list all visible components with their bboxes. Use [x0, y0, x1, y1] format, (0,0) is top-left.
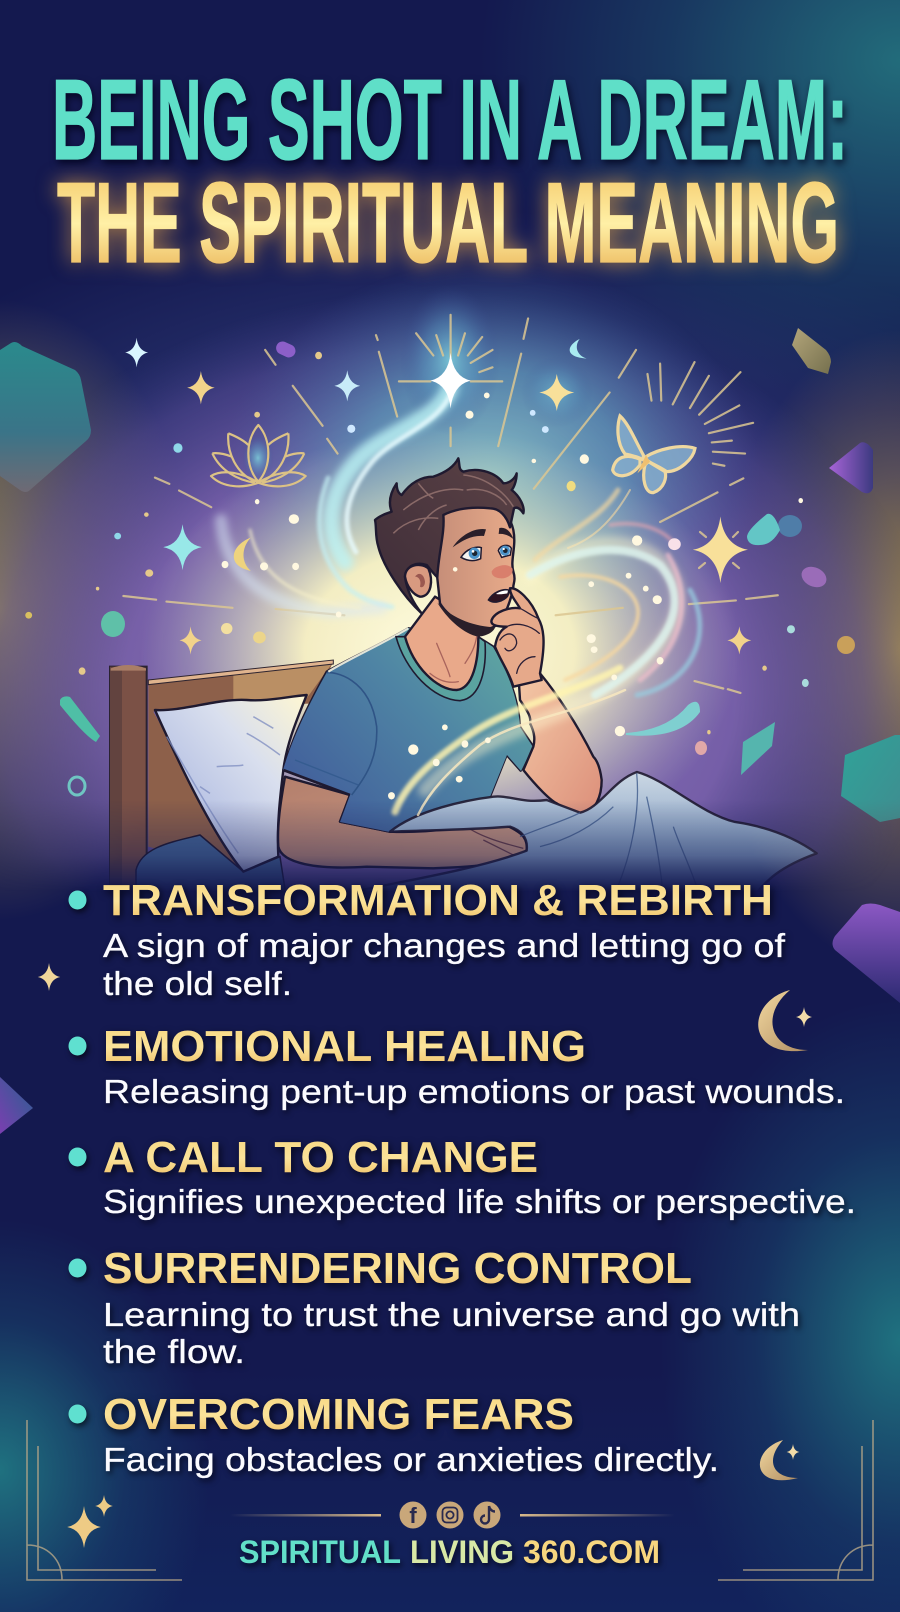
item 1: the old self. — [103, 966, 292, 1003]
sparkle left — [38, 963, 60, 991]
item 1: A sign of major changes and letting go of — [103, 928, 786, 965]
item 2: Releasing pent-up emotions or past wounds. — [103, 1074, 845, 1111]
neck crease — [430, 637, 477, 682]
website url — [239, 1534, 660, 1570]
moon lower sparkle — [787, 1444, 799, 1460]
moon upper right — [758, 990, 808, 1051]
divider right — [520, 1514, 675, 1516]
pillow creases — [167, 717, 280, 853]
shirt details — [283, 628, 523, 857]
title — [52, 57, 848, 287]
item 5: Facing obstacles or anxieties directly. — [103, 1442, 719, 1479]
item 3 — [68, 1134, 856, 1221]
back swirls — [221, 388, 630, 612]
website url: 360.COM — [523, 1534, 660, 1570]
corner frame left — [27, 1420, 182, 1580]
item 4: the flow. — [103, 1334, 245, 1371]
headboard rail — [148, 660, 333, 685]
moon sparkle — [796, 1007, 812, 1027]
teeth — [496, 590, 508, 594]
hair — [375, 458, 524, 613]
bed and pillow — [110, 628, 533, 900]
social icon: instagram — [436, 1502, 464, 1528]
butterfly — [613, 416, 695, 493]
social icon: facebook: f — [409, 1503, 417, 1528]
item 4: Learning to trust the universe and go with — [103, 1297, 800, 1334]
footer — [230, 1502, 675, 1570]
corner frame right — [718, 1420, 873, 1580]
item 4: SURRENDERING CONTROL — [103, 1245, 692, 1293]
bed sheet — [135, 834, 286, 888]
item 5: OVERCOMING FEARS — [103, 1391, 574, 1439]
collar — [396, 637, 485, 701]
item 3: A CALL TO CHANGE — [103, 1134, 538, 1182]
shirt — [283, 628, 533, 832]
item 2 — [68, 1023, 845, 1111]
website url: SPIRITUAL — [239, 1534, 401, 1570]
moon lower right — [760, 1440, 798, 1480]
social icon: tiktok — [474, 1502, 500, 1528]
item 1: TRANSFORMATION & REBIRTH — [103, 877, 773, 925]
light rays — [123, 315, 778, 693]
hair strands — [393, 475, 513, 533]
headboard warm side — [233, 664, 331, 700]
small sparkle bottom left — [95, 1495, 113, 1517]
face — [435, 503, 515, 629]
sparkling dots — [25, 352, 809, 800]
illustration: dreamer in bed — [0, 250, 900, 910]
social icon: facebook — [400, 1502, 426, 1528]
gold star ticks — [699, 532, 739, 568]
decorative moons and stars — [0, 904, 900, 1548]
item 4 — [68, 1245, 800, 1371]
sparkle stars — [125, 338, 751, 654]
head, neck and hand — [375, 458, 602, 814]
crescent moons — [234, 339, 587, 571]
nose — [492, 565, 513, 578]
lotus — [211, 425, 306, 486]
shirt colour gradient — [283, 628, 533, 832]
inner ear — [415, 574, 425, 587]
pillow — [155, 695, 307, 872]
blanket — [382, 770, 818, 886]
hand — [491, 588, 544, 687]
finger lines — [500, 608, 539, 673]
headboard panel — [148, 662, 333, 873]
forearm — [518, 673, 602, 814]
item 5 — [68, 1391, 719, 1479]
big sparkle bottom left — [67, 1506, 101, 1548]
floating gem shapes — [0, 328, 900, 822]
item 1 — [68, 877, 786, 1003]
neck — [405, 597, 487, 690]
item 3: Signifies unexpected life shifts or perspective. — [103, 1184, 856, 1221]
arm on the bed — [278, 777, 527, 868]
brows — [453, 528, 513, 547]
ear — [405, 565, 431, 597]
chin shadow — [437, 603, 495, 637]
divider left — [230, 1514, 381, 1516]
radiant glow — [0, 250, 900, 910]
website url: LIVING — [410, 1534, 514, 1570]
mouth — [488, 590, 509, 602]
bullet list — [68, 877, 856, 1479]
eyes — [461, 545, 511, 561]
blanket folds — [520, 773, 694, 878]
item 2: EMOTIONAL HEALING — [103, 1023, 586, 1071]
purple gem right — [832, 904, 900, 1003]
front swirls — [395, 524, 700, 815]
purple gem left — [0, 1077, 33, 1134]
bedpost — [110, 665, 147, 900]
